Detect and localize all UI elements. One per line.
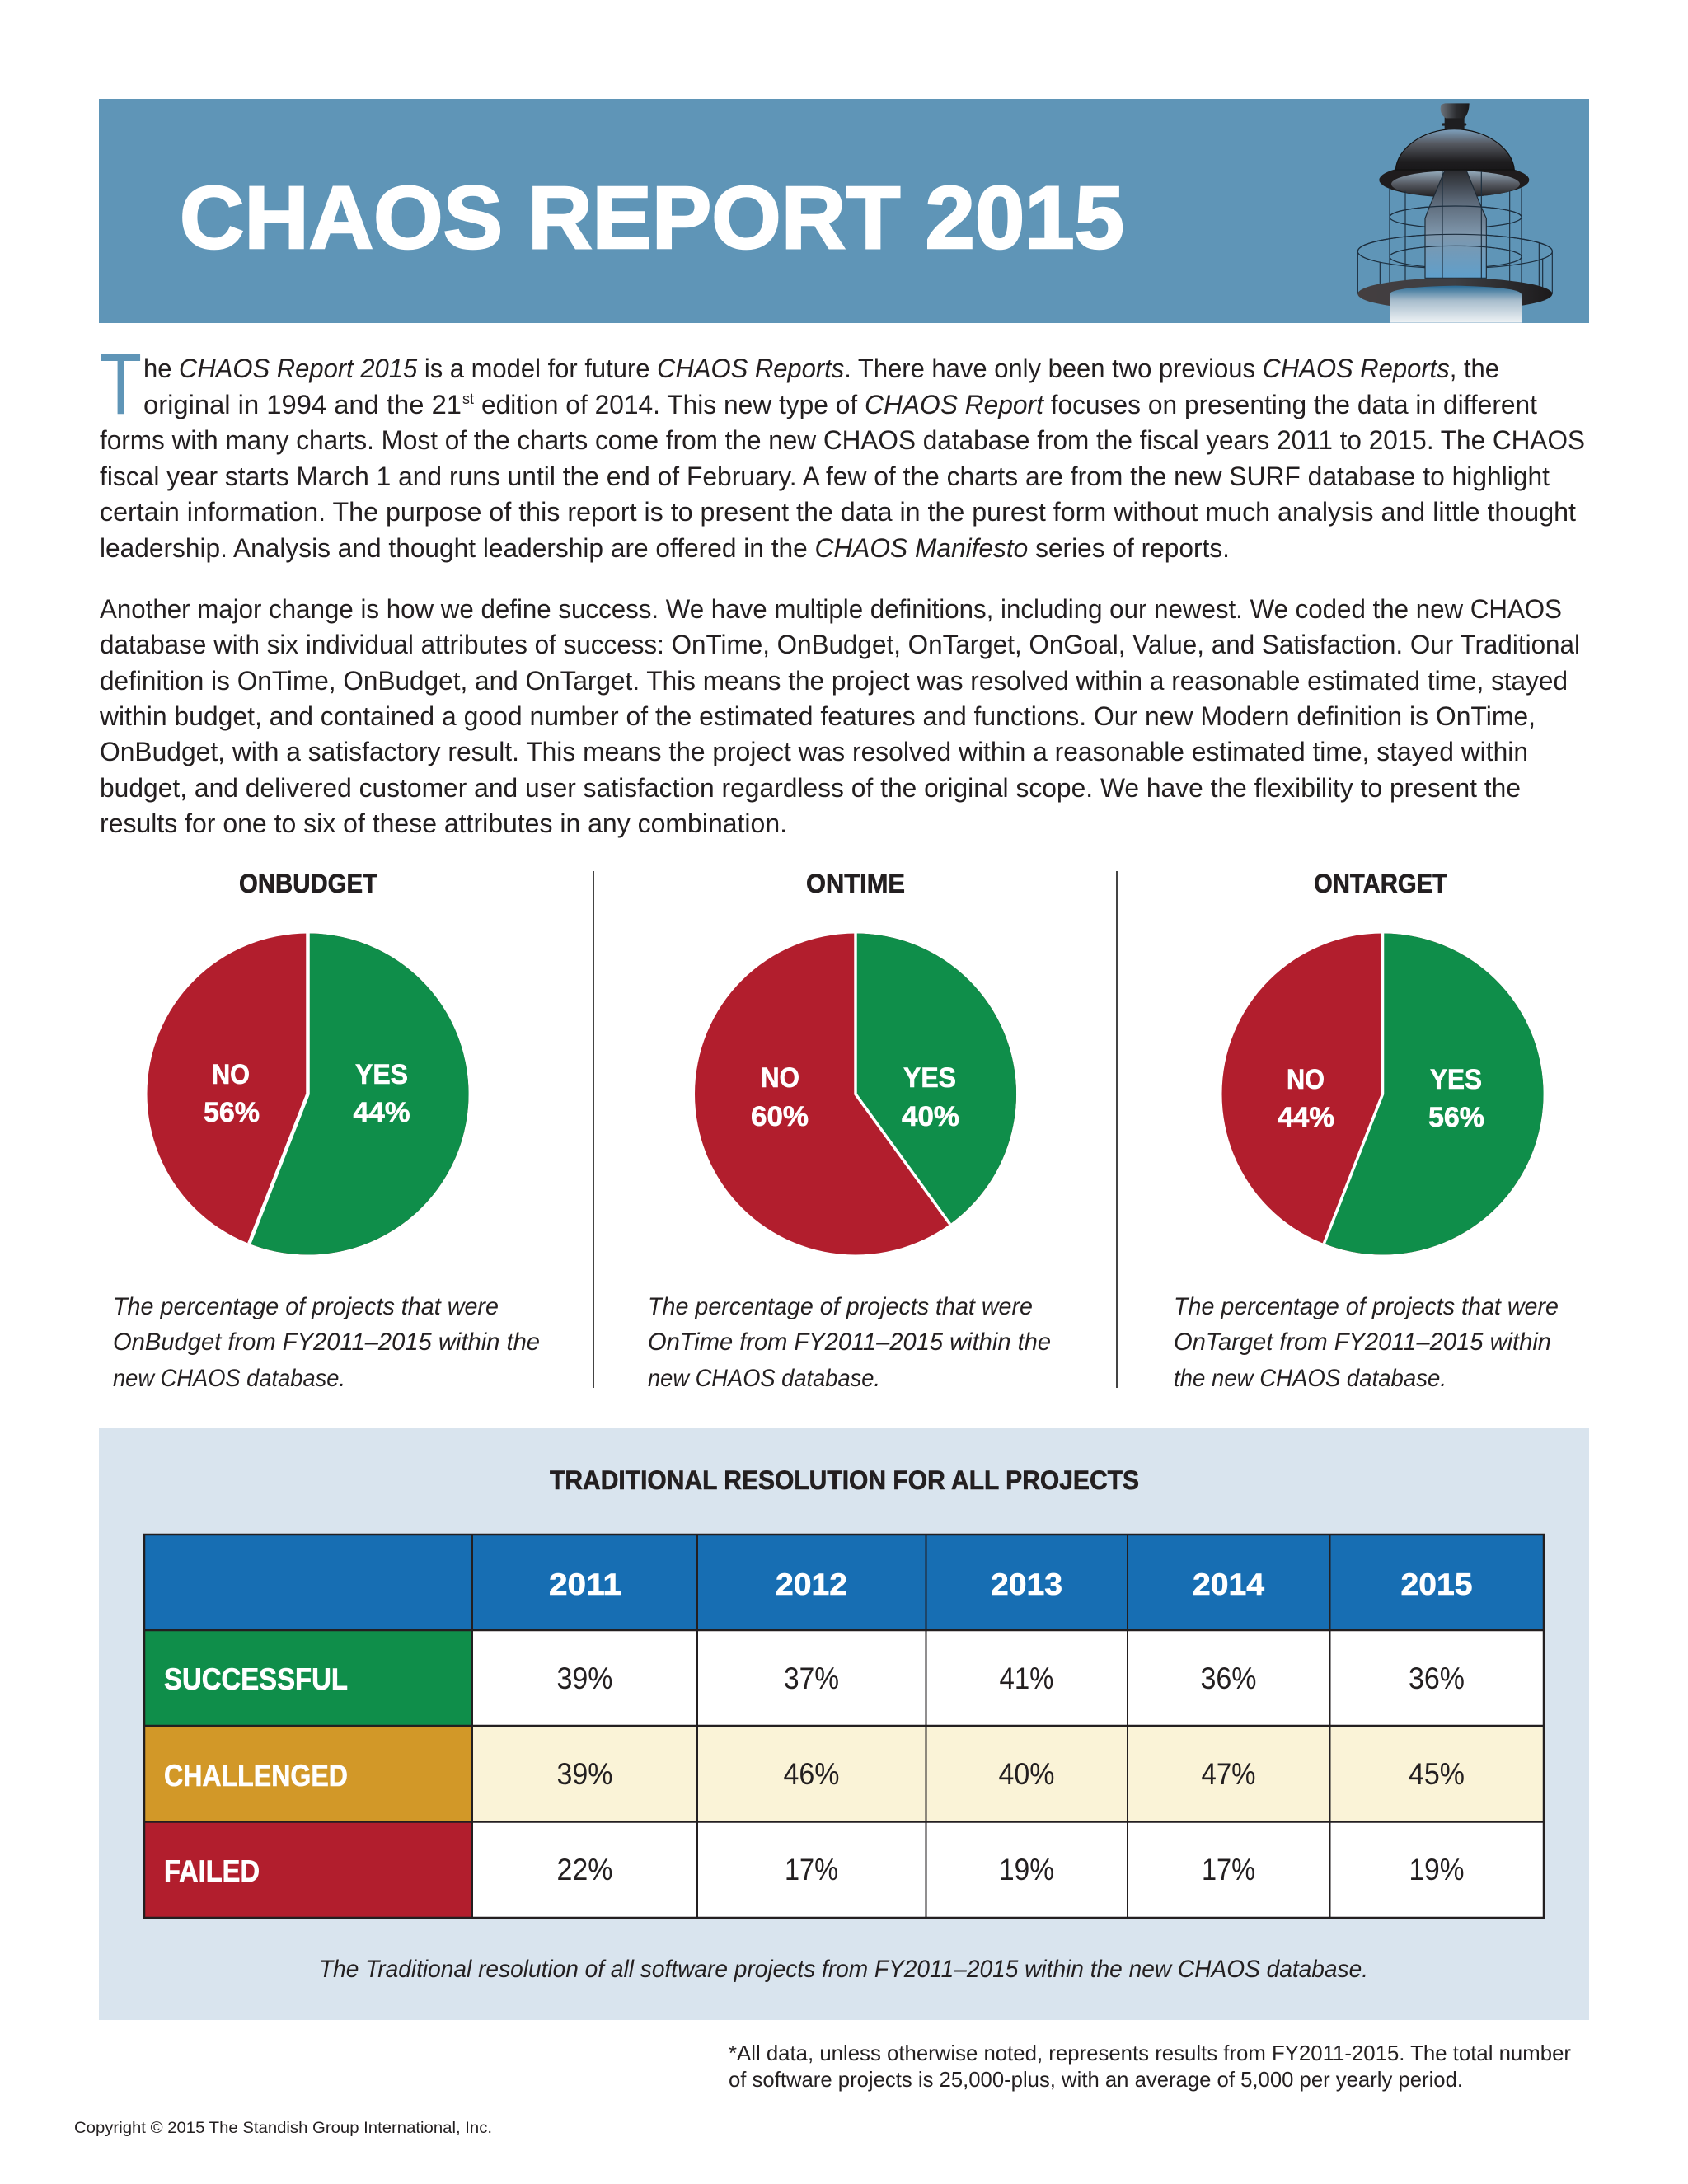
pie chart: OnBudget: 56%: [204, 1097, 260, 1128]
header row: 2014: [1193, 1568, 1264, 1601]
intro paragraph 2: budget, and delivered customer and user satisfaction regardless of the original scope. We have the flexibility to present the: [100, 773, 1521, 803]
footnote: *All data, unless otherwise noted, represents results from FY2011-2015. The total number: [729, 2041, 1571, 2065]
header row: 2012: [776, 1568, 847, 1601]
row: failed: 19%: [1409, 1853, 1464, 1886]
pie chart: OnTime: 40%: [902, 1101, 959, 1132]
pie chart: OnBudget: 44%: [353, 1097, 410, 1128]
row: successful: 36%: [1200, 1661, 1256, 1695]
header row: 2011: [549, 1568, 621, 1601]
row: challenged: [164, 1757, 1465, 1793]
row: challenged: CHALLENGED: [164, 1759, 348, 1793]
row: failed: 17%: [785, 1853, 838, 1886]
intro paragraph 2: Another major change is how we define success. We have multiple definitions, including our newest. We coded the new CHAOS: [100, 594, 1562, 624]
footnote: [729, 2041, 1571, 2092]
title: CHAOS REPORT 2015: [180, 167, 1124, 267]
pie chart: OnTarget: 56%: [1428, 1102, 1484, 1133]
caption: OnTarget: [1174, 1293, 1559, 1392]
intro paragraph 1: forms with many charts. Most of the charts come from the new CHAOS database from the fiscal years 2011 to 2015. The CHAOS: [100, 425, 1585, 455]
row: challenged: 46%: [783, 1757, 839, 1791]
header banner: [99, 99, 1589, 323]
caption: OnTarget: OnTarget from FY2011–2015 within: [1174, 1329, 1551, 1356]
caption: OnBudget: The percentage of projects that were: [113, 1293, 499, 1320]
intro paragraph 1: fiscal year starts March 1 and runs until the end of February. A few of the charts are from the new SURF database to highlight: [100, 462, 1550, 491]
row: successful: 36%: [1409, 1661, 1465, 1695]
caption: OnTime: The percentage of projects that were: [648, 1293, 1033, 1320]
row: successful: 37%: [784, 1661, 839, 1695]
row: failed: 22%: [557, 1853, 613, 1886]
table: [144, 1535, 1544, 1918]
header row: 2013: [991, 1568, 1062, 1601]
row: challenged: 45%: [1409, 1757, 1465, 1791]
header row: [549, 1568, 1472, 1601]
caption: OnTarget: The percentage of projects that were: [1174, 1293, 1559, 1320]
row: challenged: 40%: [999, 1757, 1055, 1791]
row: successful: 39%: [557, 1661, 613, 1695]
table caption: The Traditional resolution of all software projects from FY2011–2015 within the new CHAOS database.: [319, 1956, 1368, 1983]
row: successful: [164, 1661, 1465, 1696]
intro paragraph 1: [100, 336, 1585, 563]
pie chart: OnBudget: NO: [212, 1059, 250, 1090]
row: failed: 19%: [999, 1853, 1054, 1886]
row: challenged: 39%: [557, 1757, 613, 1791]
footnote: of software projects is 25,000-plus, with an average of 5,000 per yearly period.: [729, 2067, 1463, 2092]
intro paragraph 2: [99, 594, 1580, 838]
row: challenged: 47%: [1202, 1757, 1256, 1791]
caption: OnTime: new CHAOS database.: [648, 1365, 880, 1392]
row: failed: FAILED: [164, 1854, 260, 1888]
row: failed: [164, 1853, 1464, 1888]
row: successful: SUCCESSFUL: [164, 1662, 348, 1696]
intro paragraph 2: results for one to six of these attributes in any combination.: [100, 808, 787, 838]
intro paragraph 1: leadership. Analysis and thought leadership are offered in the CHAOS Manifesto series of reports.: [100, 533, 1230, 563]
intro paragraph 2: definition is OnTime, OnBudget, and OnTarget. This means the project was resolved within a reasonable estimated time, stayed: [100, 666, 1568, 696]
pie chart: OnTime: NO: [761, 1062, 799, 1094]
intro paragraph 1: certain information. The purpose of this report is to present the data in the purest form without much analysis and little thought: [100, 497, 1576, 527]
pie chart: OnTarget: NO: [1287, 1064, 1325, 1095]
heading: OnTarget: ONTARGET: [1314, 869, 1447, 898]
caption: OnTime: [648, 1293, 1051, 1392]
caption: OnBudget: [113, 1293, 540, 1392]
pie chart: OnTime: 60%: [751, 1101, 809, 1132]
panel: traditional resolution table: [99, 1428, 1589, 2020]
copyright: Copyright © 2015 The Standish Group International, Inc.: [74, 2119, 492, 2137]
heading: OnTime: ONTIME: [806, 869, 905, 898]
intro paragraph 2: within budget, and contained a good number of the estimated features and functions. Our new Modern definition is OnTime,: [99, 701, 1536, 731]
intro paragraph 2: OnBudget, with a satisfactory result. This means the project was resolved within a reasonable estimated time, stayed within: [100, 737, 1528, 766]
row: failed: 17%: [1202, 1853, 1255, 1886]
pie chart: OnTarget: [1221, 933, 1544, 1254]
drop cap: T: [100, 336, 142, 433]
caption: OnTarget: the new CHAOS database.: [1174, 1365, 1447, 1392]
caption: OnBudget: OnBudget from FY2011–2015 within the: [113, 1329, 540, 1356]
pie chart: OnTime: [695, 933, 1016, 1254]
heading: OnBudget: ONBUDGET: [239, 869, 377, 898]
row: successful: 41%: [999, 1661, 1053, 1695]
intro paragraph 1: edition of 2014. This new type of CHAOS Report focuses on presenting the data in different: [481, 390, 1537, 419]
caption: OnTime: OnTime from FY2011–2015 within the: [648, 1329, 1051, 1356]
intro paragraph 1: st: [462, 391, 474, 407]
caption: OnBudget: new CHAOS database.: [113, 1365, 345, 1392]
panel: OnBudget: [113, 869, 540, 1392]
pie chart: OnTarget: 44%: [1278, 1102, 1334, 1133]
pie chart: OnBudget: YES: [355, 1059, 408, 1090]
intro paragraph 2: database with six individual attributes of success: OnTime, OnBudget, OnTarget, OnGoal, Value, and Satisfaction. Our Traditional: [100, 630, 1580, 659]
panel: OnTarget: [1174, 869, 1559, 1392]
pie chart: OnBudget: [147, 933, 469, 1254]
icon: lighthouse: [1357, 103, 1552, 323]
pie chart: OnTarget: YES: [1430, 1064, 1482, 1095]
intro paragraph 1: original in 1994 and the 21: [143, 390, 462, 419]
intro paragraph 1: he CHAOS Report 2015 is a model for future CHAOS Reports. There have only been two previous CHAOS Reports, the: [143, 354, 1499, 383]
header row: 2015: [1401, 1568, 1472, 1601]
panel: OnTime: [648, 869, 1051, 1392]
pie chart: OnTime: YES: [903, 1062, 956, 1094]
table heading: TRADITIONAL RESOLUTION FOR ALL PROJECTS: [550, 1465, 1139, 1495]
